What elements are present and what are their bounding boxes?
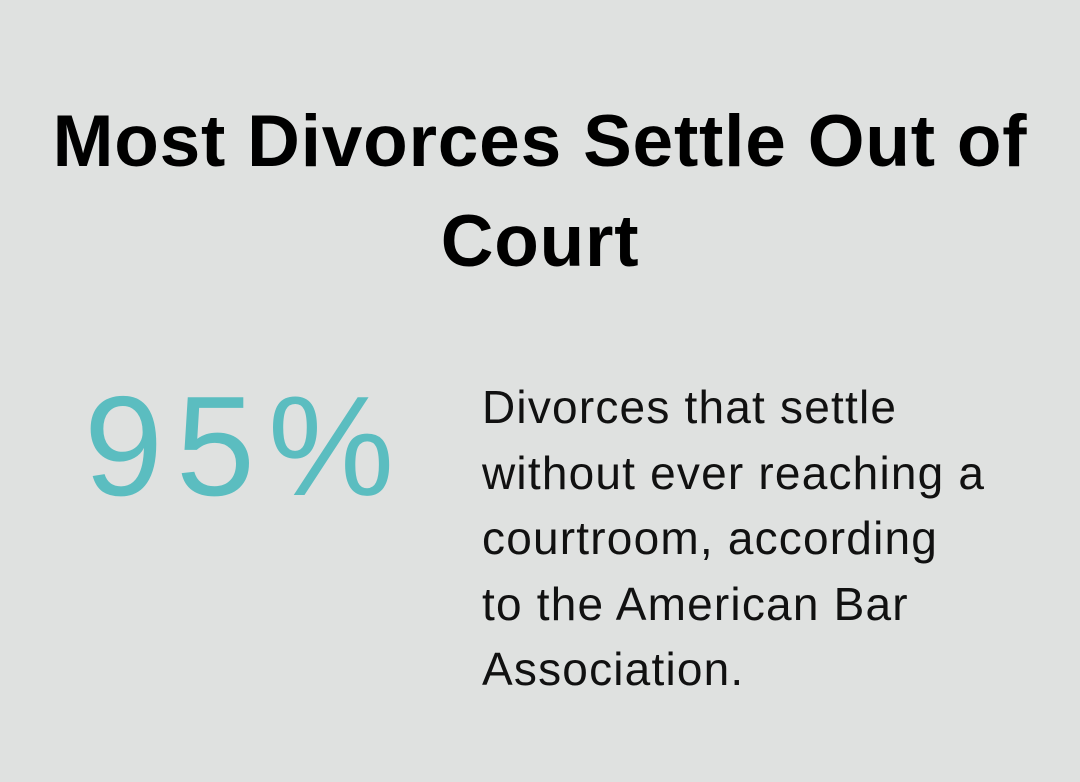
statistic: 95%: 95%: [84, 367, 407, 526]
title: Court: [441, 201, 639, 282]
description text: without ever reaching a: [482, 446, 985, 498]
title: [53, 101, 1027, 282]
description text: [482, 381, 985, 695]
description text: Divorces that settle: [482, 381, 897, 433]
title: Most Divorces Settle Out of: [53, 101, 1027, 182]
description text: courtroom, according: [482, 512, 938, 564]
description text: to the American Bar: [482, 578, 909, 630]
description text: Association.: [482, 643, 744, 695]
